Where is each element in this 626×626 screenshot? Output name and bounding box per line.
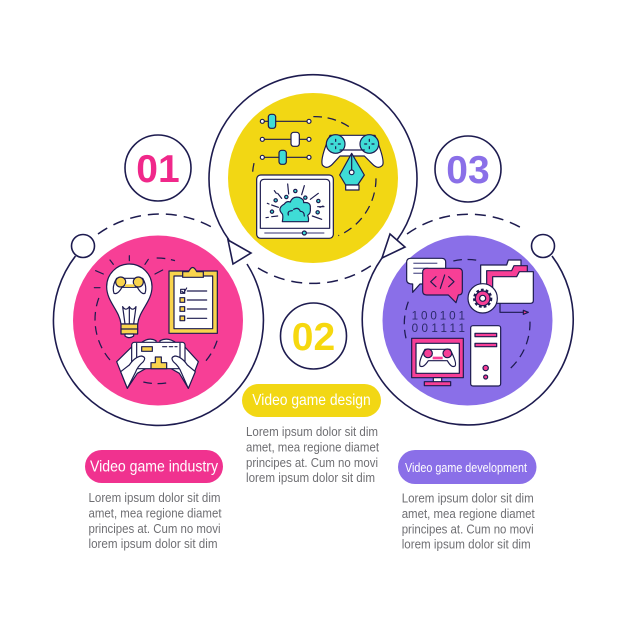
step 3 body text: principes at. Cum no movi <box>402 522 534 536</box>
step 1 ring start node <box>72 234 94 258</box>
step 3 pill heading: Video game development <box>405 460 527 475</box>
icon: pen nib <box>340 153 364 190</box>
icon: light bulb with gamepad <box>94 256 163 338</box>
step 3 outer ring <box>362 256 573 425</box>
step 2 dashed arc <box>258 263 375 283</box>
step 3 body text: Lorem ipsum dolor sit dim <box>402 492 534 506</box>
step 2 number badge <box>280 303 346 369</box>
arrow: step 1 to step 2 <box>228 240 251 264</box>
step 2 body text <box>246 425 379 485</box>
step 3 body text: amet, mea regione diamet <box>402 507 535 521</box>
step 1 outer ring <box>53 256 263 425</box>
icon: monitor with gamepad <box>412 338 463 386</box>
step 1 pill heading <box>85 450 223 483</box>
step 3 pill heading <box>398 450 536 484</box>
step 1 pill heading: Video game industry <box>90 458 218 476</box>
panel: step 1 video game industry <box>53 135 263 551</box>
step 2 pill heading: Video game design <box>252 392 371 409</box>
step 2 body text: principes at. Cum no movi <box>246 456 378 470</box>
icon: sliders <box>260 114 311 164</box>
icon: computer tower <box>471 326 501 386</box>
step 2 body text: Lorem ipsum dolor sit dim <box>246 425 378 439</box>
icon: hands holding phone <box>117 339 198 388</box>
icon: folders and gear <box>468 260 533 314</box>
step 1 filled circle <box>73 236 243 406</box>
step 1 body text: amet, mea regione diamet <box>88 506 222 520</box>
step 1 body text <box>88 491 222 551</box>
arrow: step 2 to step 3 <box>382 234 405 258</box>
icon: chat bubbles <box>407 258 462 303</box>
icon: gamepad <box>322 135 383 167</box>
step 3 dashed arc <box>407 214 525 234</box>
step 2 filled circle <box>228 93 398 263</box>
step 3 body text <box>402 492 535 552</box>
step 3 filled circle <box>382 236 552 406</box>
icon: tablet with idea cloud <box>257 175 333 238</box>
step 1 number badge: 01 <box>136 148 180 191</box>
step 2 body text: amet, mea regione diamet <box>246 440 379 454</box>
binary code text: 001111 <box>412 322 465 335</box>
binary code text <box>412 310 465 335</box>
binary code text: 100101 <box>412 310 465 323</box>
step 2 number badge: 02 <box>292 316 335 359</box>
icon group: sliders, gamepad, pen, tablet <box>253 114 383 238</box>
step 3 body text: lorem ipsum dolor sit dim <box>402 538 531 552</box>
panel: step 2 video game design <box>209 75 417 485</box>
step 1 body text: principes at. Cum no movi <box>88 522 220 536</box>
step 2 pill heading <box>242 384 381 417</box>
step 2 outer ring <box>209 75 417 240</box>
icon group: chat, folders, code, computer <box>404 258 533 386</box>
step 3 number badge <box>435 136 501 202</box>
step 1 dashed arc <box>98 214 215 234</box>
step 3 number badge: 03 <box>446 149 490 192</box>
step 3 ring end node <box>532 234 554 258</box>
step 1 number badge <box>125 135 191 201</box>
step 1 body text: Lorem ipsum dolor sit dim <box>88 491 220 505</box>
icon group: bulb, clipboard, phone <box>94 256 217 388</box>
step 1 body text: lorem ipsum dolor sit dim <box>88 537 218 551</box>
panel: step 3 video game development <box>362 136 573 552</box>
icon: clipboard checklist <box>169 267 217 333</box>
step 2 body text: lorem ipsum dolor sit dim <box>246 471 375 485</box>
